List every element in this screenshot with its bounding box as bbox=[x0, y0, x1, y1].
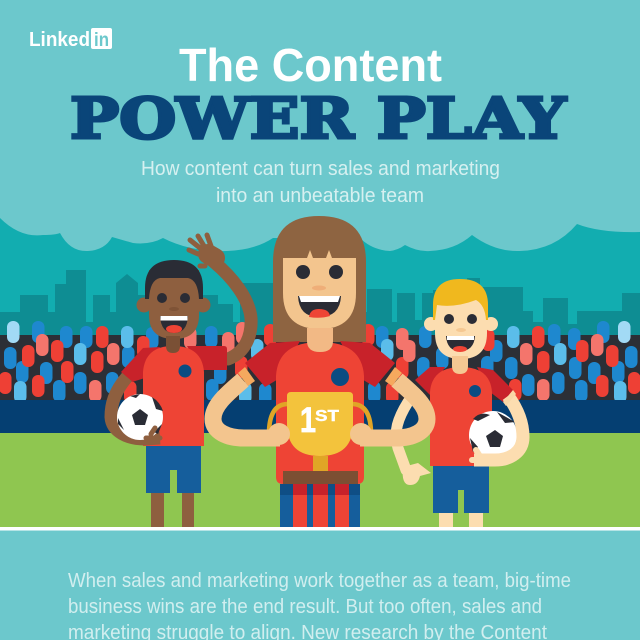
subtitle: How content can turn sales and marketing bbox=[141, 158, 500, 180]
striped socks and shorts bbox=[280, 484, 360, 527]
face bbox=[283, 258, 356, 329]
crowd backdrop bbox=[0, 335, 640, 401]
mouth bbox=[160, 316, 188, 333]
logo: LinkedIn: in bbox=[94, 30, 109, 51]
trophy bbox=[269, 392, 371, 484]
ears bbox=[136, 298, 152, 312]
hand bbox=[146, 428, 160, 438]
crowd of fans bbox=[0, 321, 640, 405]
stadium scene bbox=[0, 218, 640, 530]
grass pitch bbox=[0, 433, 640, 527]
badge bbox=[178, 364, 192, 378]
fringe notches bbox=[307, 250, 332, 258]
arms bbox=[213, 380, 427, 438]
neck bbox=[452, 356, 468, 374]
nose bbox=[312, 286, 326, 290]
sleeves bbox=[415, 367, 513, 402]
cuff bbox=[503, 390, 516, 406]
nose bbox=[456, 328, 466, 332]
subtitle: into an unbeatable team bbox=[216, 185, 424, 207]
title: The Content: The Content bbox=[179, 39, 442, 91]
1st label: ST bbox=[315, 408, 339, 425]
player: right with ball bbox=[396, 279, 523, 527]
badge bbox=[331, 368, 349, 386]
eyes bbox=[157, 293, 167, 303]
title: POWER PLAY: POWER PLAY bbox=[70, 86, 567, 152]
sleeves bbox=[245, 341, 395, 387]
shorts bbox=[146, 446, 201, 493]
ears bbox=[424, 317, 438, 331]
intro paragraph bbox=[68, 569, 571, 640]
hair bbox=[433, 279, 488, 320]
teal sky below clouds bbox=[0, 218, 640, 340]
hands bbox=[268, 423, 290, 445]
neck bbox=[307, 328, 333, 352]
arm bbox=[474, 396, 523, 460]
soccer ball bbox=[469, 411, 517, 459]
navy wall bbox=[0, 400, 640, 433]
trophy handles bbox=[269, 404, 371, 431]
neck bbox=[166, 336, 180, 353]
mouth bbox=[446, 336, 475, 351]
waving hand bbox=[189, 235, 215, 266]
trophy cup bbox=[287, 392, 353, 456]
fist bbox=[403, 463, 431, 485]
eyes bbox=[296, 265, 310, 279]
hair bbox=[145, 260, 203, 299]
head bbox=[435, 300, 487, 359]
shorts bbox=[433, 466, 489, 513]
player: left waving with ball bbox=[111, 235, 251, 527]
subtitle bbox=[141, 158, 500, 207]
city skyline bbox=[0, 270, 640, 340]
trophy stem bbox=[313, 456, 328, 471]
hand bbox=[472, 450, 481, 460]
shirt bbox=[143, 346, 204, 446]
hair back bbox=[273, 216, 366, 342]
far arm bbox=[396, 402, 408, 470]
eyes bbox=[444, 314, 454, 324]
cuffs bbox=[238, 367, 402, 386]
intro paragraph: business wins are the end result. But too often, sales and bbox=[68, 595, 542, 618]
shirt bbox=[276, 342, 364, 484]
1st label: 1 bbox=[300, 401, 316, 440]
player: center captain with trophy bbox=[213, 216, 427, 527]
legs bbox=[151, 490, 164, 527]
nose bbox=[169, 307, 179, 311]
white touchline bbox=[0, 527, 640, 530]
raised arm bbox=[214, 262, 251, 359]
logo: LinkedIn: Linked bbox=[29, 29, 90, 51]
trophy base bbox=[283, 471, 358, 484]
soccer ball bbox=[117, 394, 163, 440]
shirt bbox=[430, 367, 492, 466]
lower arm bbox=[111, 377, 160, 439]
legs bbox=[439, 510, 453, 527]
intro paragraph: When sales and marketing work together as a team, big-time bbox=[68, 569, 571, 592]
1st label bbox=[300, 401, 339, 440]
mouth bbox=[298, 296, 341, 317]
badge bbox=[469, 385, 481, 397]
head bbox=[149, 270, 199, 339]
sleeves bbox=[121, 346, 227, 382]
